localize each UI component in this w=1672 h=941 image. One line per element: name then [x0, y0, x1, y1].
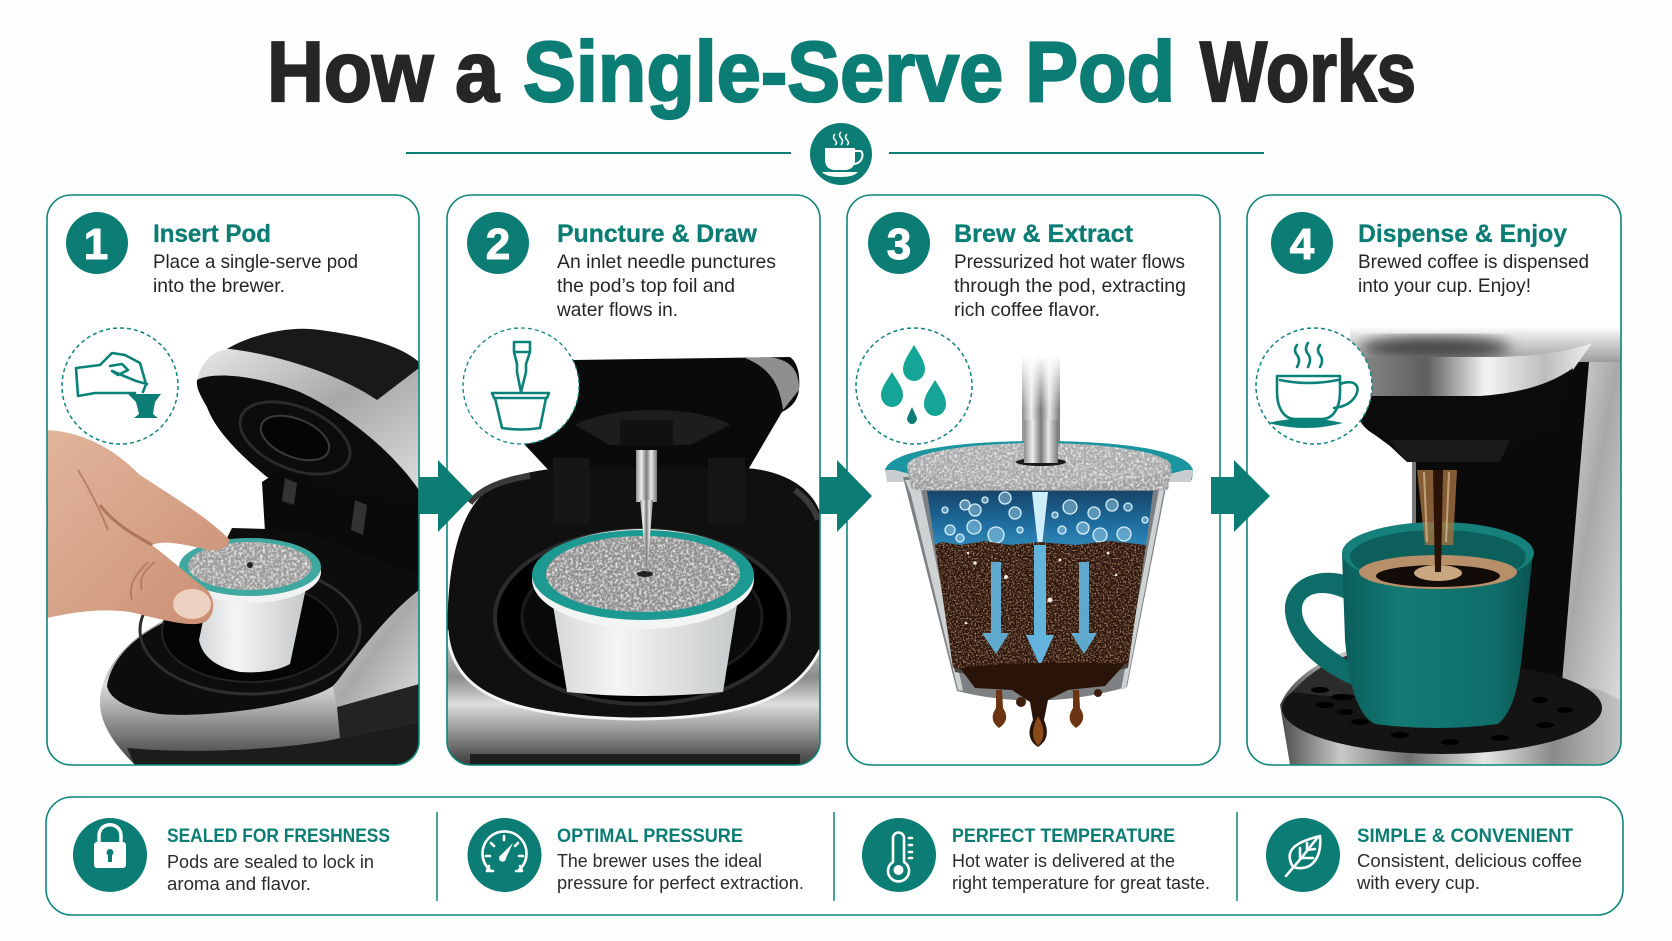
- heading: Puncture & Draw: [557, 220, 758, 248]
- step number 4: [1271, 212, 1333, 274]
- step number 2: 2: [486, 220, 510, 269]
- description: rich coffee flavor.: [954, 299, 1100, 321]
- icon: steaming cup: [1256, 328, 1372, 444]
- description: into your cup. Enjoy!: [1358, 275, 1531, 297]
- benefit: perfect temperature: [862, 818, 1210, 893]
- water and bubbles: [927, 491, 1153, 546]
- step number 1: [66, 212, 128, 274]
- arrow 1: [419, 460, 473, 532]
- description: through the pod, extracting: [954, 275, 1186, 297]
- benefit text: right temperature for great taste.: [952, 872, 1210, 893]
- benefit text: with every cup.: [1356, 872, 1480, 893]
- title: How a: [267, 25, 500, 120]
- pod wall: [903, 477, 1168, 701]
- benefit text: aroma and flavor.: [167, 873, 311, 894]
- benefit: sealed for freshness: [73, 818, 390, 894]
- hot water pipe: [1022, 358, 1060, 442]
- coffee grounds: [935, 541, 1146, 676]
- title: [267, 25, 1416, 120]
- panel: step 4 dispense and enjoy: [1247, 195, 1621, 765]
- panel: step 1 insert pod: [47, 195, 419, 765]
- flow arrows: [982, 545, 1097, 666]
- arrow 2: [820, 460, 872, 532]
- illustration: needle puncturing the pod: [447, 357, 820, 765]
- description: into the brewer.: [153, 275, 285, 297]
- step number 1: 1: [84, 220, 108, 269]
- description: Pressurized hot water flows: [954, 251, 1185, 273]
- illustration: opening the brewer and inserting a pod: [47, 329, 419, 765]
- icon: leaf: [1266, 818, 1340, 892]
- description: An inlet needle punctures: [557, 251, 776, 273]
- description: [1358, 251, 1589, 297]
- heading: Dispense & Enjoy: [1358, 220, 1567, 248]
- benefit: simple and convenient: [1266, 818, 1582, 893]
- benefit text: [1356, 825, 1582, 893]
- inlet needle: [620, 420, 673, 574]
- drip tray: [1280, 650, 1621, 765]
- benefit text: [557, 825, 804, 893]
- benefit text: pressure for perfect extraction.: [557, 872, 804, 893]
- benefit text: PERFECT TEMPERATURE: [952, 825, 1175, 847]
- coffee drips: [960, 663, 1125, 747]
- benefit text: Pods are sealed to lock in: [167, 851, 374, 872]
- panel: benefits strip: [46, 797, 1623, 915]
- icon: hand placing pod: [62, 328, 178, 444]
- icon: thermometer: [862, 818, 936, 892]
- benefit text: The brewer uses the ideal: [557, 850, 762, 871]
- panel: step 2 puncture and draw: [447, 195, 820, 765]
- brewer head: [1350, 326, 1621, 462]
- foil top: [907, 443, 1171, 489]
- benefit text: Consistent, delicious coffee: [1357, 850, 1582, 871]
- icon: pressure gauge: [468, 818, 542, 892]
- icon: needle and pod: [463, 328, 579, 444]
- brewer column: [1412, 345, 1621, 712]
- pod with foil: [532, 529, 754, 696]
- arrow 3: [1211, 460, 1270, 532]
- panel: step 3 brew and extract: [847, 195, 1220, 765]
- coffee stream: [1417, 470, 1457, 572]
- benefit text: OPTIMAL PRESSURE: [557, 825, 743, 847]
- title: Single-Serve Pod: [523, 25, 1175, 120]
- benefit text: [952, 825, 1210, 893]
- step number 4: 4: [1290, 220, 1315, 269]
- heading: Brew & Extract: [954, 220, 1134, 248]
- benefit text: Hot water is delivered at the: [952, 850, 1175, 871]
- description: [556, 251, 776, 321]
- description: the pod’s top foil and: [557, 275, 735, 297]
- benefit: optimal pressure: [468, 818, 804, 893]
- illustration: pod cross section: [885, 355, 1193, 747]
- description: [153, 251, 358, 297]
- description: Place a single-serve pod: [153, 251, 358, 273]
- description: Brewed coffee is dispensed: [1358, 251, 1589, 273]
- step number 3: [868, 212, 930, 274]
- title: Works: [1200, 25, 1416, 120]
- benefit text: [167, 825, 390, 894]
- step number 2: [467, 212, 529, 274]
- benefit text: SIMPLE & CONVENIENT: [1357, 825, 1573, 847]
- description: [954, 251, 1186, 321]
- benefit text: SEALED FOR FRESHNESS: [167, 825, 390, 847]
- icon: padlock: [73, 818, 147, 892]
- hand: [47, 430, 230, 624]
- teal mug: [1285, 522, 1534, 728]
- illustration: coffee pouring into mug: [1280, 326, 1621, 765]
- icon: coffee cup emblem: [810, 123, 872, 185]
- step number 3: 3: [887, 220, 911, 269]
- heading: Insert Pod: [153, 220, 271, 248]
- pod held in hand: [179, 538, 321, 672]
- icon: water drops: [856, 328, 972, 444]
- teal rim: [885, 441, 1193, 480]
- description: water flows in.: [556, 299, 678, 321]
